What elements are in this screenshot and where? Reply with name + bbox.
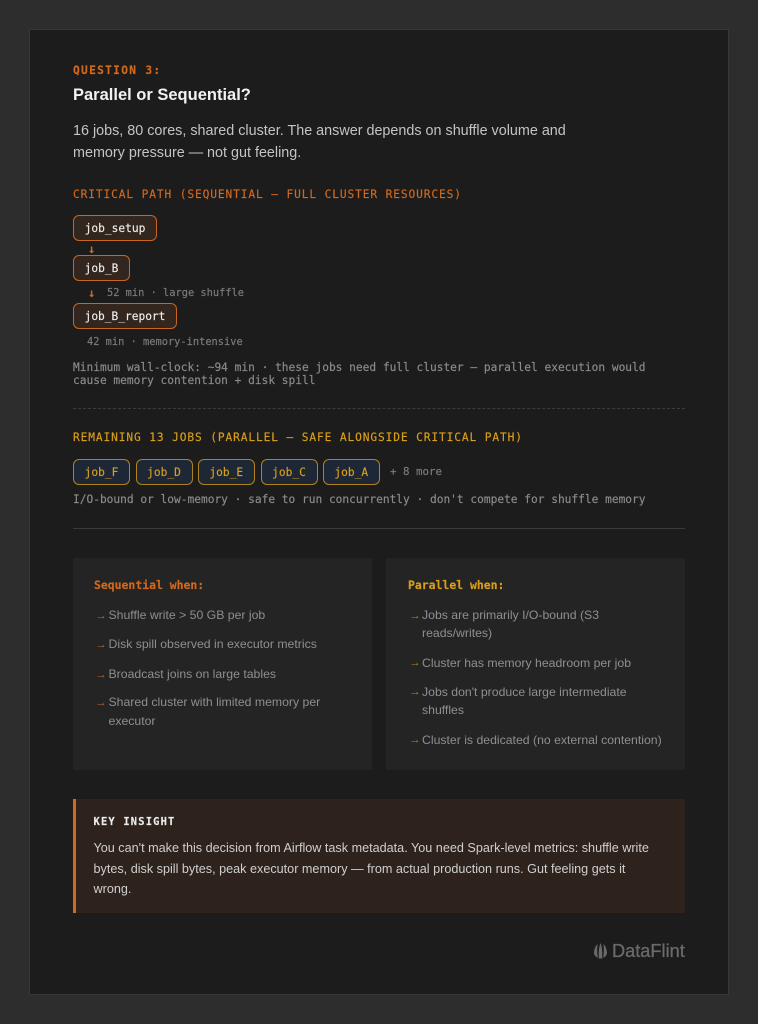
job: job_D: job_D — [147, 466, 181, 478]
solid divider — [73, 528, 685, 529]
job: job_B_report: job_B_report — [85, 310, 165, 323]
job: job_setup: job_setup — [85, 222, 145, 235]
job: job_B: job_B — [85, 262, 118, 275]
panel heading: sequential: Sequential when: — [94, 578, 204, 592]
critical path explanation — [73, 360, 646, 387]
list: sequential conditions: → — [95, 697, 106, 709]
list: parallel conditions: → — [409, 734, 420, 746]
callout text: wrong. — [94, 882, 131, 896]
list: sequential conditions: Shuffle write > 50 GB per job — [108, 608, 265, 622]
job: job_E — [198, 458, 255, 484]
panel: parallel when — [386, 558, 685, 770]
icon: logo mark — [594, 943, 607, 958]
job: job_A: job_A — [334, 466, 368, 478]
list: parallel conditions: Cluster has memory headroom per job — [422, 656, 631, 670]
job: job_D — [136, 458, 192, 484]
job: job_F — [73, 458, 130, 484]
title: Parallel or Sequential? — [73, 86, 251, 104]
job: job_C — [260, 458, 318, 484]
list: parallel conditions — [409, 608, 662, 747]
list: sequential conditions: Broadcast joins on large tables — [108, 666, 276, 680]
job: job_B_report — [73, 303, 177, 329]
heading: remaining jobs: REMAINING 13 JOBS (PARALLEL — SAFE ALONGSIDE CRITICAL PATH) — [73, 431, 523, 444]
job: job_E: job_E — [209, 466, 243, 478]
list: sequential conditions: → — [95, 639, 106, 651]
list: parallel conditions: shuffles — [422, 703, 464, 717]
list: sequential conditions: Shared cluster with limited memory per — [108, 694, 320, 708]
callout text: bytes, disk spill bytes, peak executor memory — from actual production runs. Gut feeling gets it — [94, 862, 625, 876]
heading: critical path: CRITICAL PATH (SEQUENTIAL — FULL CLUSTER RESOURCES) — [73, 188, 462, 201]
more jobs note: + 8 more — [390, 465, 442, 478]
panel: sequential when — [73, 558, 372, 770]
list: sequential conditions: → — [95, 610, 106, 622]
arrow: setup to B: ↓ — [88, 242, 95, 256]
note: 52 min: 52 min · large shuffle — [107, 287, 244, 299]
callout: key insight — [73, 799, 685, 913]
panel heading: parallel: Parallel when: — [408, 578, 504, 592]
logo: DataFlint — [594, 941, 685, 961]
callout text — [94, 841, 649, 896]
job: job_B — [73, 255, 130, 281]
list: sequential conditions — [95, 608, 320, 728]
job: job_setup — [73, 215, 157, 241]
list: parallel conditions: Cluster is dedicated (no external contention) — [422, 733, 662, 747]
list: sequential conditions: Disk spill observed in executor metrics — [108, 636, 317, 650]
list: sequential conditions: → — [95, 668, 106, 680]
parallel explanation: I/O-bound or low-memory · safe to run concurrently · don't compete for shuffle memory — [73, 493, 646, 506]
dashed divider — [73, 408, 685, 409]
list: parallel conditions: Jobs are primarily I/O-bound (S3 — [422, 608, 599, 622]
critical path explanation: Minimum wall-clock: ~94 min · these jobs need full cluster — parallel execution would — [73, 360, 646, 374]
intro text: 16 jobs, 80 cores, shared cluster. The answer depends on shuffle volume and — [73, 122, 566, 138]
list: parallel conditions: → — [409, 657, 420, 669]
job: job_F: job_F — [85, 466, 118, 478]
callout heading: KEY INSIGHT — [94, 816, 176, 828]
callout text: You can't make this decision from Airflow task metadata. You need Spark-level metrics: shuffle write — [94, 841, 649, 855]
note: 42 min: 42 min · memory-intensive — [87, 336, 243, 348]
critical path explanation: cause memory contention + disk spill — [73, 374, 315, 387]
list: sequential conditions: executor — [108, 714, 155, 728]
job: job_A — [322, 458, 380, 484]
eyebrow: question 3: QUESTION 3: — [73, 64, 161, 77]
intro text: memory pressure — not gut feeling. — [73, 145, 301, 161]
accent bar — [73, 799, 76, 913]
intro text — [73, 122, 566, 161]
list: parallel conditions: → — [409, 610, 420, 622]
wordmark: DataFlint — [612, 941, 685, 961]
list: parallel conditions: Jobs don't produce large intermediate — [422, 684, 627, 698]
arrow: B to report: ↓ — [88, 286, 95, 300]
list: parallel conditions: reads/writes) — [422, 626, 492, 640]
job: job_C: job_C — [272, 466, 306, 478]
list: parallel conditions: → — [409, 686, 420, 698]
